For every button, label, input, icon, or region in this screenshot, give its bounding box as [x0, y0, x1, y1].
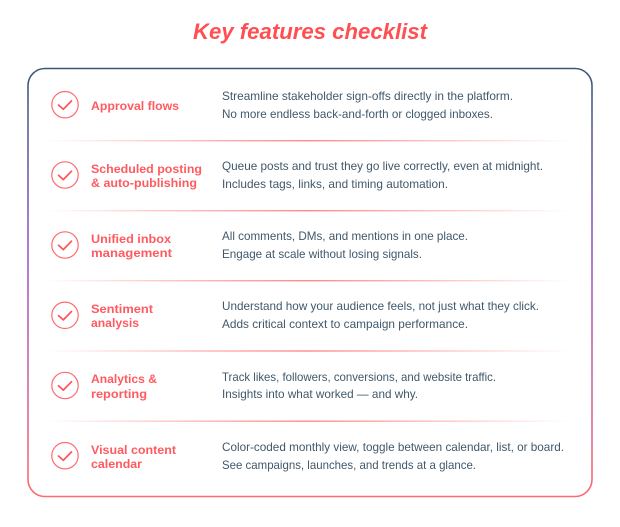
icon: check circle [52, 302, 78, 328]
description: visual calendar: Color-coded monthly view, toggle between calendar, list, or board. [222, 441, 564, 454]
description: sentiment analysis: Adds critical context to campaign performance. [222, 318, 468, 331]
icon: check circle [52, 372, 78, 399]
description: sentiment analysis [222, 300, 539, 331]
description: analytics [222, 371, 496, 401]
icon: check circle [52, 162, 78, 188]
row: sentiment analysis [52, 300, 539, 331]
row: analytics [52, 371, 496, 401]
description: analytics: Insights into what worked — and why. [222, 388, 418, 401]
description: scheduled posting: Includes tags, links, and timing automation. [222, 178, 448, 191]
row: visual calendar [52, 441, 564, 472]
description: scheduled posting [222, 160, 543, 191]
label: unified inbox: Unified inbox [91, 232, 171, 246]
description: unified inbox: Engage at scale without losing signals. [222, 248, 422, 261]
row: approval flows [52, 90, 513, 121]
icon: check circle [52, 232, 78, 258]
title: Key features checklist [193, 19, 429, 44]
label: approval flows: Approval flows [91, 99, 179, 113]
description: unified inbox: All comments, DMs, and mentions in one place. [222, 230, 468, 243]
description: visual calendar: See campaigns, launches, and trends at a glance. [222, 459, 476, 472]
label: scheduled posting: & auto-publishing [91, 176, 197, 190]
icon: check circle [52, 442, 78, 469]
description: analytics: Track likes, followers, conversions, and website traffic. [222, 371, 496, 384]
panel: checklist card [28, 68, 592, 496]
label: visual calendar: calendar [91, 457, 142, 471]
label: scheduled posting: Scheduled posting [91, 162, 202, 176]
description: approval flows [222, 90, 513, 121]
row: unified inbox [52, 230, 468, 261]
label: sentiment analysis: analysis [91, 316, 139, 330]
label: scheduled posting [91, 162, 202, 190]
label: sentiment analysis [91, 302, 153, 330]
description: approval flows: No more endless back-and-forth or clogged inboxes. [222, 108, 493, 121]
label: analytics: reporting [91, 387, 147, 401]
label: visual calendar [91, 443, 176, 471]
label: sentiment analysis: Sentiment [91, 302, 153, 316]
description: visual calendar [222, 441, 564, 472]
label: unified inbox: management [91, 246, 172, 260]
row: scheduled posting [52, 160, 543, 191]
description: sentiment analysis: Understand how your audience feels, not just what they click. [222, 300, 539, 313]
icon: check circle [52, 92, 78, 118]
label: analytics: Analytics & [91, 372, 157, 386]
description: unified inbox [222, 230, 468, 261]
label: visual calendar: Visual content [91, 443, 176, 457]
label: analytics [91, 372, 157, 401]
description: scheduled posting: Queue posts and trust they go live correctly, even at midnight. [222, 160, 543, 173]
description: approval flows: Streamline stakeholder sign-offs directly in the platform. [222, 90, 513, 103]
label: unified inbox [91, 232, 172, 260]
